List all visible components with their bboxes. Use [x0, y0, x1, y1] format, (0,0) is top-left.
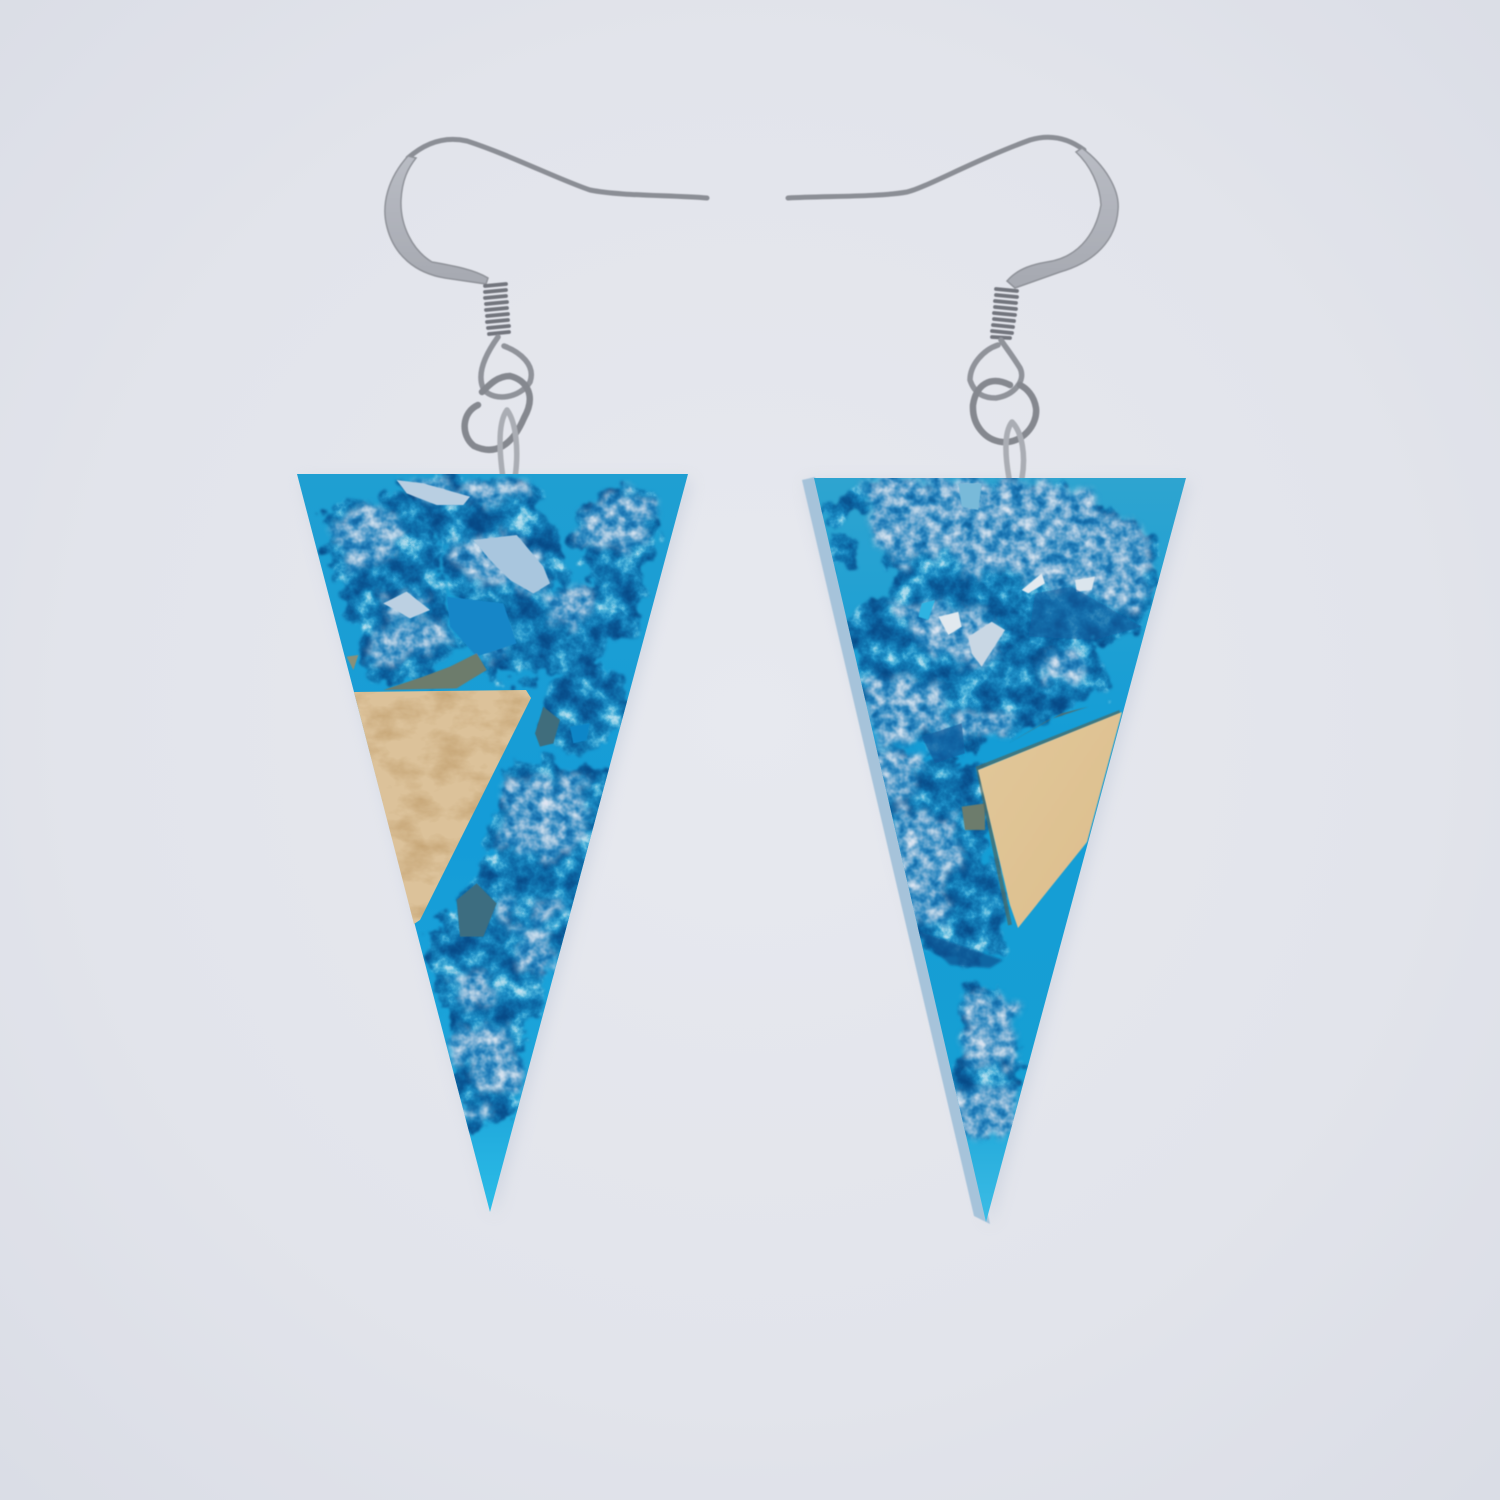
left earring — [297, 139, 707, 1216]
right wood inlay — [978, 712, 1122, 928]
right ear hook — [788, 137, 1118, 478]
bail — [500, 410, 517, 478]
left triangle resin body — [297, 474, 688, 1212]
coil — [992, 289, 1017, 338]
left ear hook — [385, 139, 707, 478]
product photo: blue resin earrings — [297, 134, 1186, 1224]
jump ring — [465, 376, 530, 450]
shadow: right triangle — [805, 482, 1190, 1226]
jump ring — [973, 381, 1036, 442]
right wood inlay shadow — [978, 712, 1120, 925]
right triangle side bevel — [802, 477, 990, 1224]
left foil flakes — [323, 477, 660, 1125]
right earring — [788, 137, 1190, 1226]
right triangle resin body — [814, 478, 1186, 1222]
silver foil — [327, 480, 653, 1120]
right foil flakes — [815, 480, 1158, 1135]
blue foil — [323, 477, 660, 1125]
foil pieces — [347, 480, 590, 937]
shadow: left triangle — [302, 480, 692, 1216]
blue foil — [815, 480, 1158, 1135]
foil pieces — [918, 483, 1142, 830]
loop — [970, 340, 1022, 398]
coil — [485, 284, 509, 334]
dark foil fragments — [915, 930, 1003, 968]
left wood inlay — [354, 690, 531, 924]
silver foil — [862, 480, 1152, 1135]
bail — [1006, 422, 1024, 478]
loop — [481, 337, 531, 397]
